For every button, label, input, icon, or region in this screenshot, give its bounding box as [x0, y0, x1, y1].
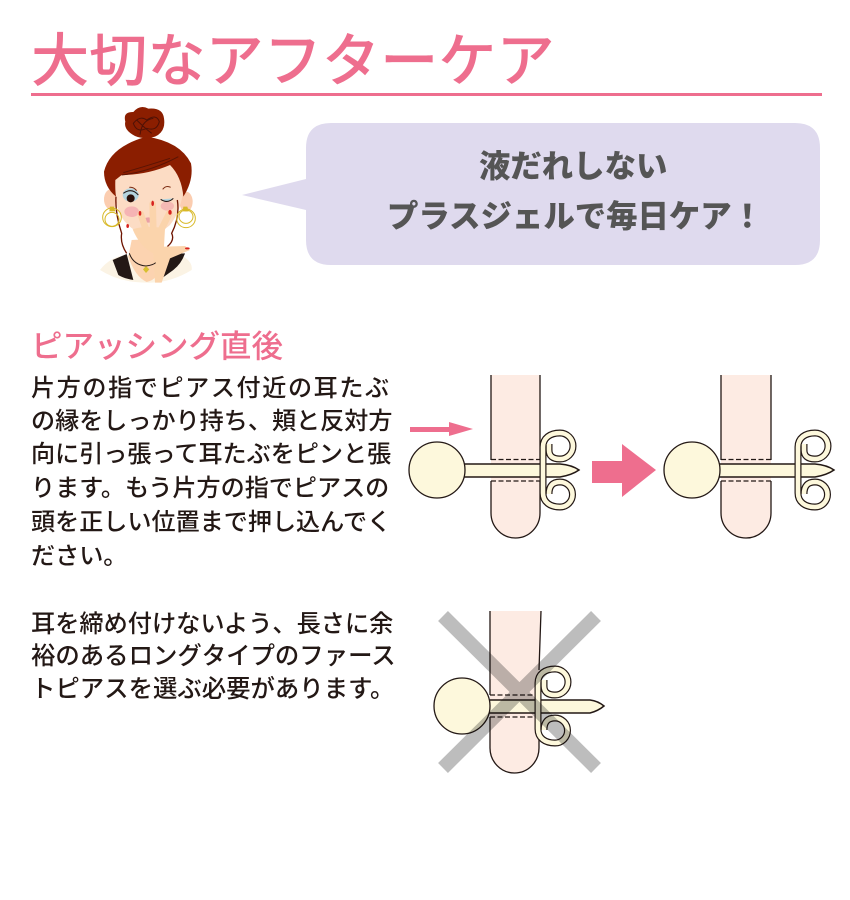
title: 大切なアフターケア: [31, 29, 555, 94]
arrow: large step arrow: [592, 444, 656, 497]
earlobe 3: [490, 611, 541, 773]
piercing 1: [409, 433, 579, 507]
text block: first paragraph: [31, 375, 392, 570]
text block: second paragraph: 耳を締め付けないよう、長さに余: [31, 611, 393, 638]
speech bubble: [242, 123, 820, 265]
earlobe 1: [491, 375, 540, 538]
piercing 2: [664, 433, 834, 507]
section heading: ピアッシング直後: [31, 328, 283, 364]
text block: first paragraph: ります。もう片方の指でピアスの: [31, 475, 389, 502]
title underline: [31, 93, 822, 96]
text block: second paragraph: トピアスを選ぶ必要があります。: [31, 676, 394, 703]
text block: first paragraph: ださい。: [31, 543, 127, 570]
earlobe 2: [721, 375, 771, 538]
text block: second paragraph: 裕のあるロングタイプのファース: [31, 643, 396, 670]
text block: first paragraph: 片方の指でピアス付近の耳たぶ: [31, 375, 391, 402]
icon: woman touching her face: [100, 107, 196, 283]
piercing 3: [434, 669, 604, 743]
arrow: small push arrow: [410, 422, 473, 436]
text block: first paragraph: の縁をしっかり持ち、頬と反対方: [31, 408, 392, 435]
bubble text line 1: 液だれしない: [479, 149, 667, 184]
bubble text line 2: プラスジェルで毎日ケア！: [387, 199, 763, 234]
text block: first paragraph: 向に引っ張って耳たぶをピンと張: [31, 441, 391, 468]
cross mark: [443, 616, 596, 768]
text block: first paragraph: 頭を正しい位置まで押し込んでく: [31, 509, 391, 536]
text block: second paragraph: [31, 611, 396, 703]
